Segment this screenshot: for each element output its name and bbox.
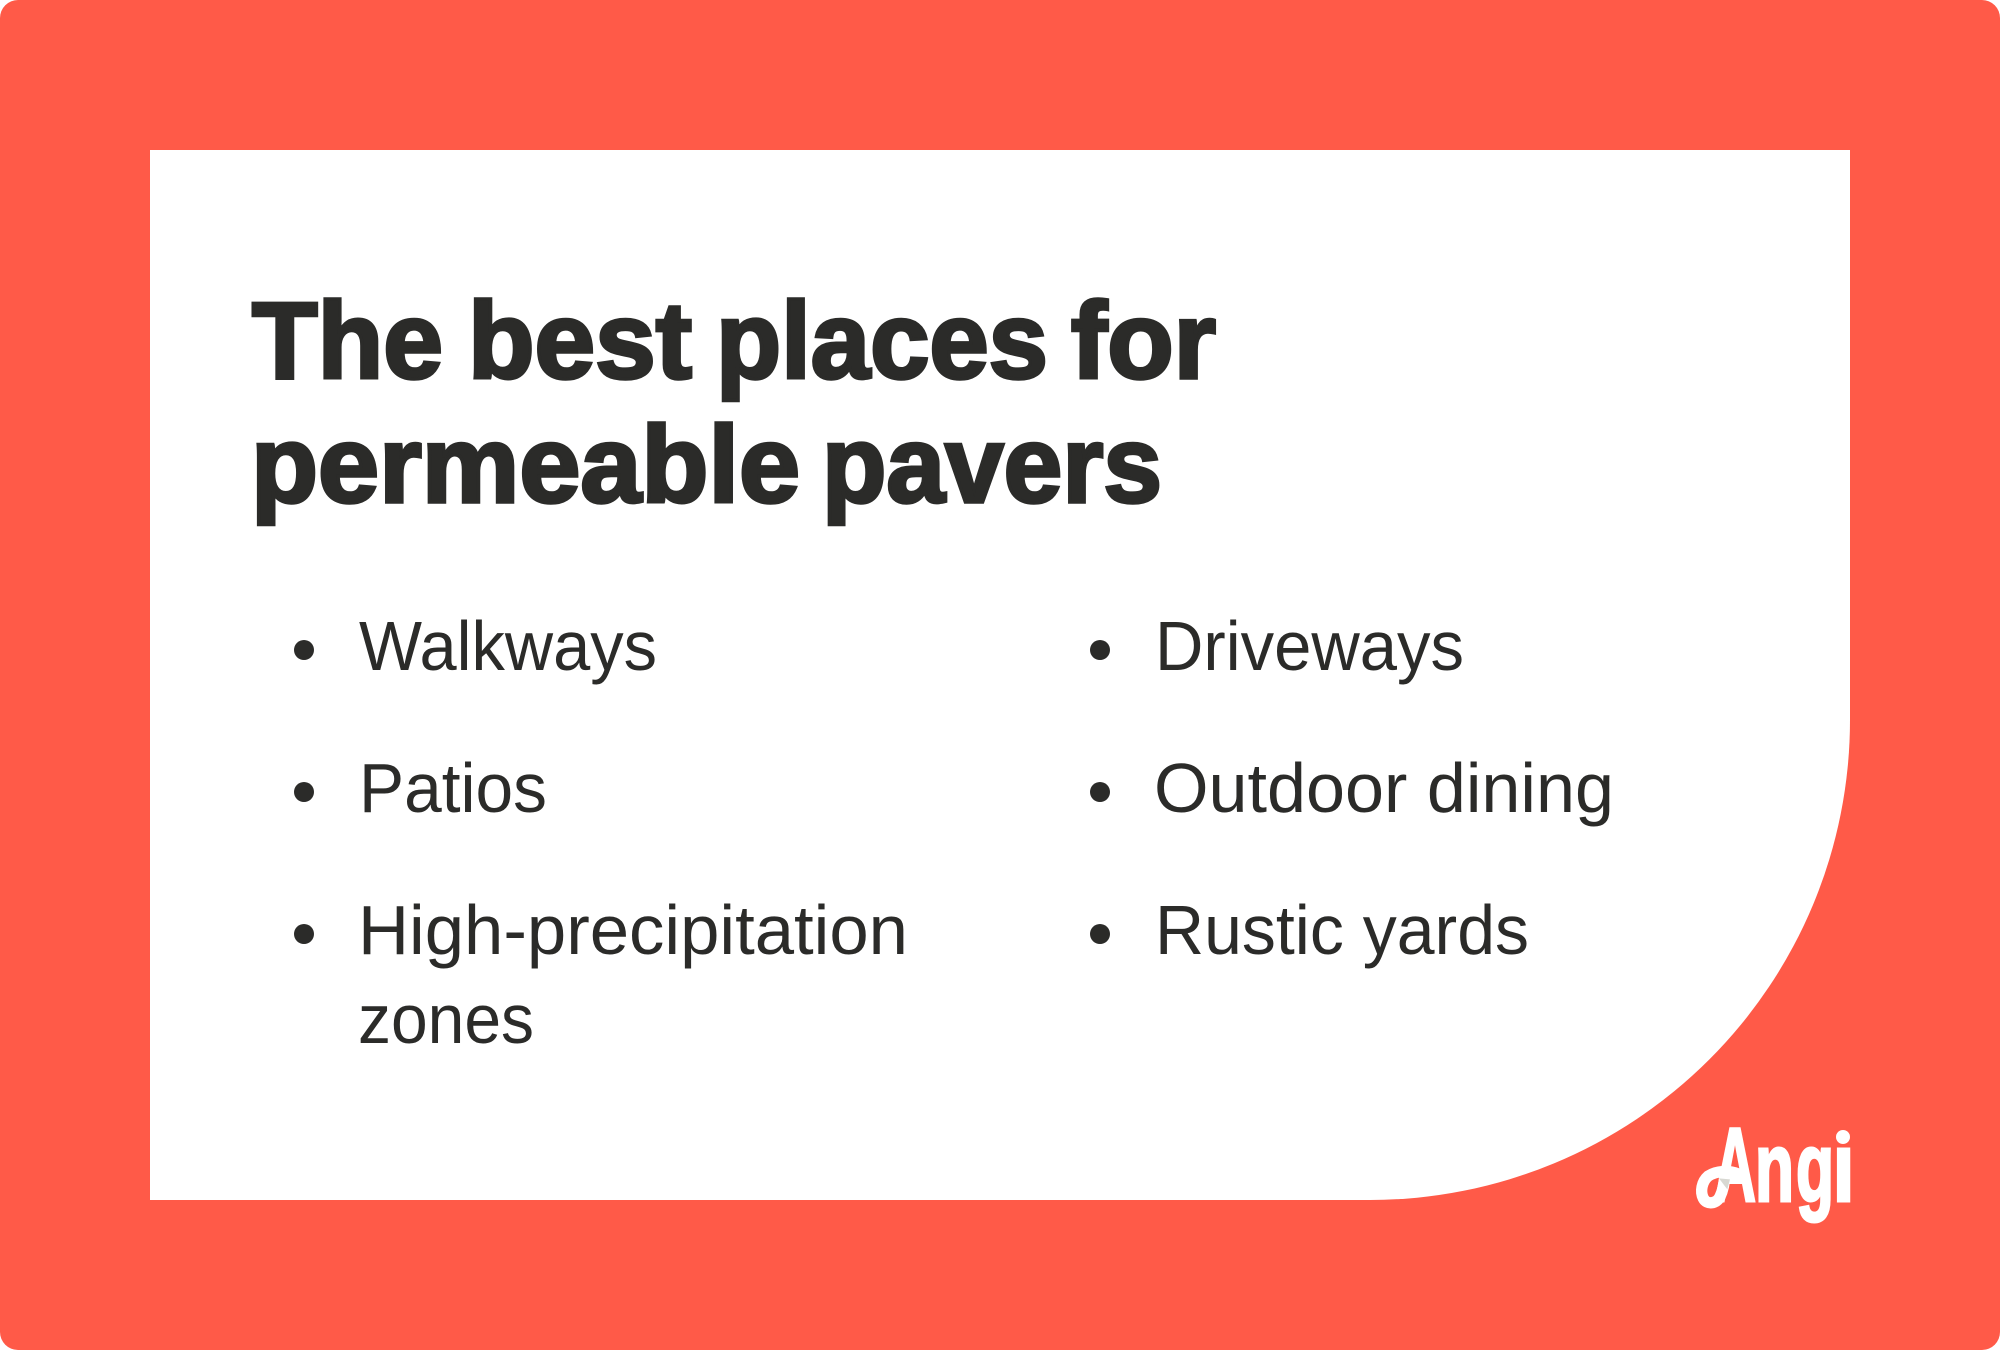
list item: High-precipitation zones <box>294 891 908 1058</box>
title: best <box>468 280 692 402</box>
logo: Angi: g <box>1796 1112 1834 1222</box>
list item: High-precipitation zones: zones <box>358 980 534 1058</box>
bullet list: left column <box>294 607 908 1058</box>
white content panel <box>150 150 1850 1200</box>
logo: Angi: A <box>1714 1107 1756 1224</box>
list item: Outdoor dining: Outdoor dining <box>1154 749 1614 827</box>
title: for <box>1071 280 1216 402</box>
logo: Angi: i <box>1833 1112 1855 1222</box>
logo: Angi: n <box>1755 1112 1794 1222</box>
title: pavers <box>822 404 1162 526</box>
list item: Rustic yards: Rustic yards <box>1155 891 1529 969</box>
title: The <box>252 280 443 402</box>
list item: High-precipitation zones: High-precipitation <box>358 891 908 969</box>
list item: Walkways: Walkways <box>359 607 657 685</box>
title: places <box>716 280 1048 402</box>
bullet list: right column <box>1090 607 1614 969</box>
list item: Patios: Patios <box>359 749 547 827</box>
title: permeable <box>251 404 800 526</box>
logo: Angi <box>1696 1127 1850 1224</box>
title <box>251 280 1216 526</box>
list item: Driveways: Driveways <box>1155 607 1464 685</box>
